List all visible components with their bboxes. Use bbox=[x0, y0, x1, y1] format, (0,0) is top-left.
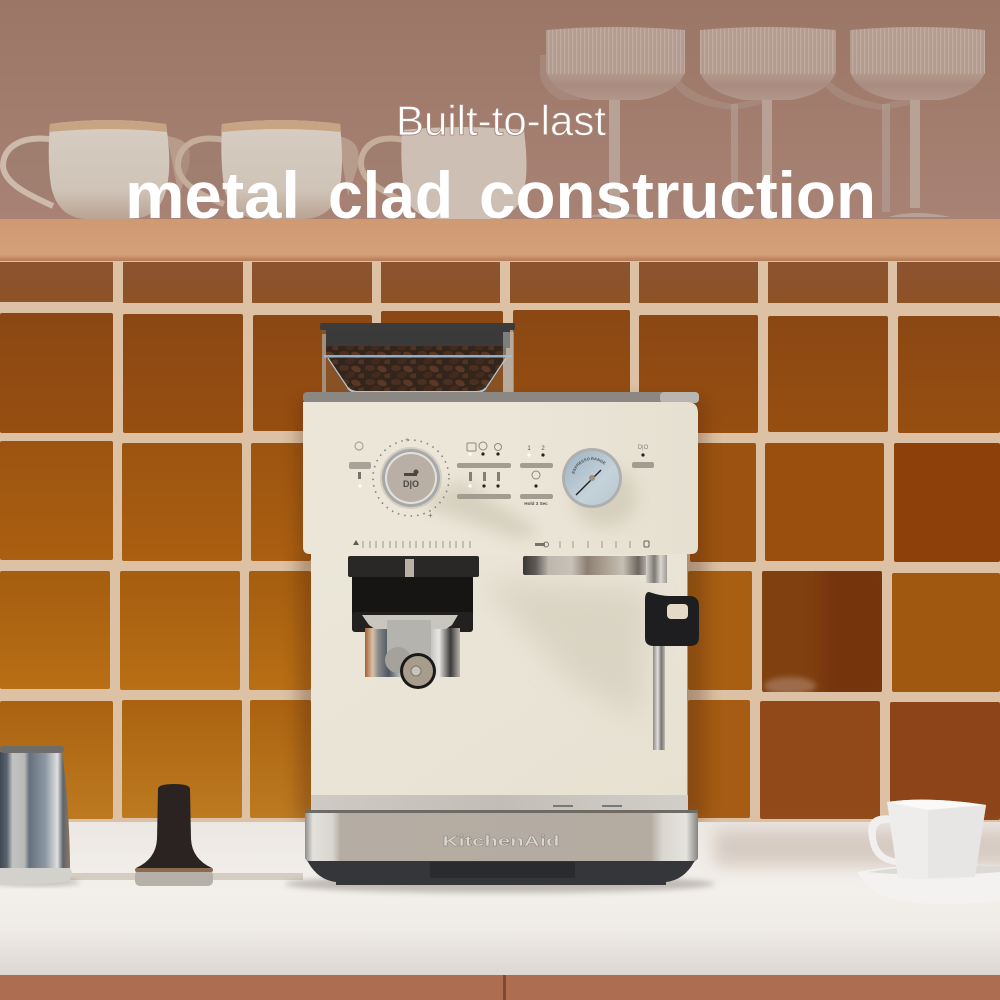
espresso machine bbox=[303, 323, 699, 885]
shot controls: Hold 3 Sec bbox=[524, 501, 548, 506]
grind selector knob: + bbox=[405, 437, 409, 444]
control panel housing bbox=[303, 402, 698, 554]
drink selection controls bbox=[457, 442, 511, 499]
wooden shelf bbox=[0, 219, 1000, 261]
mug one bbox=[3, 120, 190, 219]
stainless drip tray front bbox=[305, 811, 698, 861]
shot controls: 2 bbox=[541, 446, 545, 452]
KitchenAid logo: KitchenAid bbox=[442, 833, 560, 850]
coffee tamper bbox=[135, 784, 213, 886]
subtitle: Built-to-last bbox=[396, 97, 606, 144]
steel top plate bbox=[303, 392, 699, 403]
panel shadows bbox=[420, 467, 637, 540]
fifth row of tiles bbox=[0, 700, 1000, 820]
steel brew ring bbox=[523, 556, 651, 575]
steam wand bbox=[645, 555, 699, 750]
bean hopper bbox=[320, 323, 515, 392]
mug three bbox=[361, 127, 526, 219]
grinder dosing head bbox=[348, 556, 479, 632]
diagonal shadow on body bbox=[480, 580, 650, 720]
wine glasses on shelf bbox=[540, 27, 985, 217]
counter reflection band bbox=[70, 830, 1000, 880]
cabinet below counter bbox=[0, 975, 1000, 1000]
drip tray top bbox=[311, 795, 688, 811]
mug two bbox=[178, 120, 359, 219]
pressure gauge bbox=[562, 448, 622, 508]
shot controls: 1 bbox=[527, 446, 531, 452]
knob play symbol: D|O bbox=[403, 479, 419, 489]
second row of tiles bbox=[0, 310, 1000, 433]
portafilter scale and lock icon bbox=[535, 541, 649, 548]
tile grout backing bbox=[0, 258, 1000, 824]
power button bbox=[349, 442, 371, 488]
third row of tiles bbox=[0, 441, 1000, 562]
wall background bbox=[0, 0, 1000, 222]
grind scale bbox=[353, 540, 470, 548]
pressure gauge: ESPRESSO RANGE bbox=[572, 457, 606, 474]
tiled backsplash bbox=[0, 262, 1000, 820]
top row of tiles bbox=[0, 262, 1000, 303]
grind selector knob: + bbox=[428, 511, 433, 520]
portafilter bbox=[362, 615, 460, 689]
headline text bbox=[125, 97, 876, 232]
machine lower body bbox=[311, 550, 687, 800]
main title: construction bbox=[479, 158, 876, 232]
main title: metal bbox=[125, 158, 300, 232]
white espresso cup and saucer bbox=[857, 800, 1000, 904]
hopper lid bbox=[320, 323, 515, 330]
machine feet base bbox=[305, 858, 698, 885]
grind selector knob bbox=[373, 437, 449, 520]
start stop button bbox=[632, 445, 654, 468]
machine shadow on counter bbox=[285, 875, 715, 893]
fourth row of tiles bbox=[0, 571, 1000, 692]
steam wand handle bbox=[645, 592, 699, 646]
milk pitcher bbox=[0, 746, 80, 886]
white counter top bbox=[0, 822, 1000, 975]
rear shadow of machine bbox=[298, 400, 706, 820]
start stop button: D|O bbox=[638, 445, 649, 451]
shot controls bbox=[520, 446, 553, 506]
main title: clad bbox=[328, 158, 453, 232]
mugs on shelf bbox=[3, 120, 526, 219]
